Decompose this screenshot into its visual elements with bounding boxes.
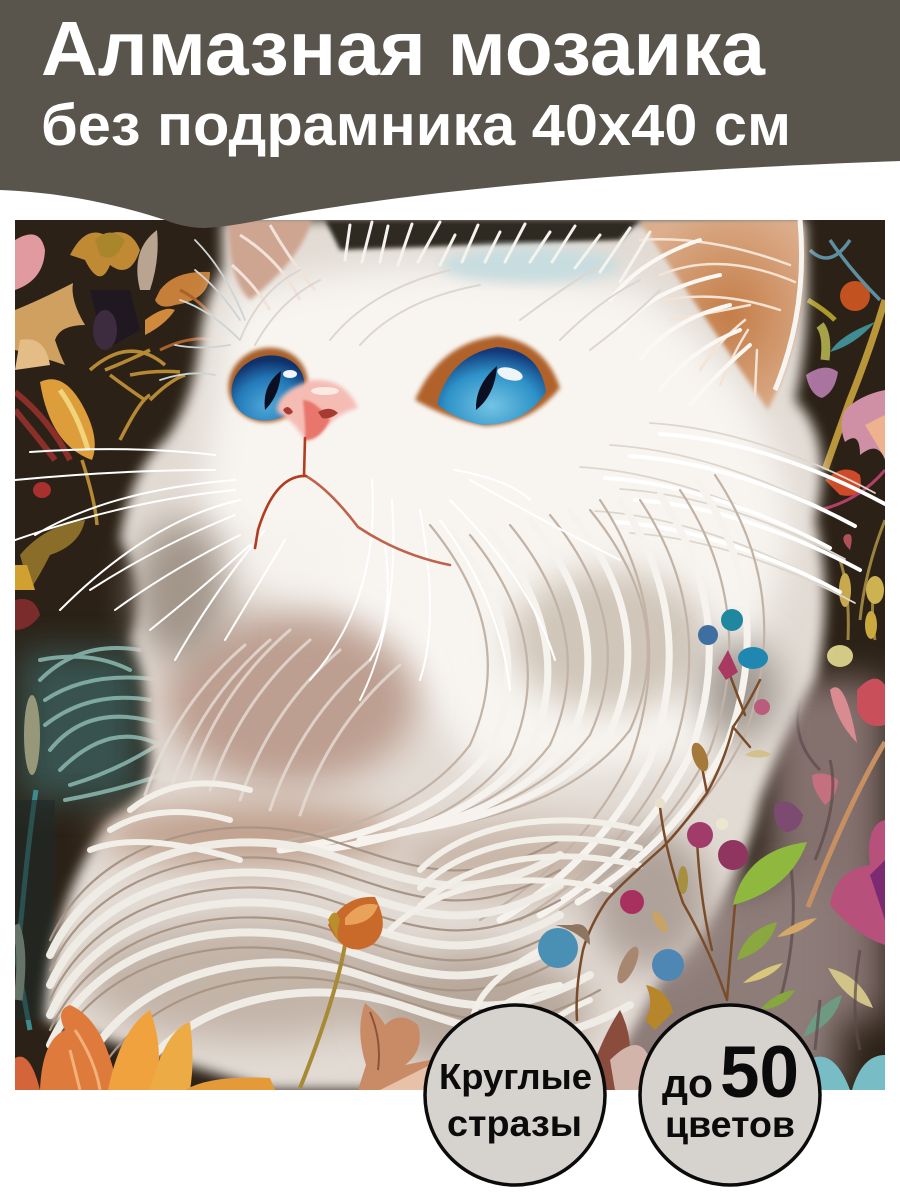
nose bbox=[277, 380, 358, 440]
cat ears bbox=[228, 220, 804, 410]
badge: up to 50 colours: 50 bbox=[720, 1032, 799, 1113]
subtitle: без подрамника 40х40 см bbox=[41, 93, 791, 158]
head fur fans bbox=[580, 423, 885, 603]
painting: white cat among flowers bbox=[15, 220, 885, 1105]
title: Алмазная мозаика bbox=[41, 6, 766, 92]
neck swirl fur bbox=[145, 475, 764, 920]
badge: round rhinestones: Круглые bbox=[439, 1056, 592, 1097]
right eye bbox=[415, 336, 560, 426]
lower body waves of fur bbox=[46, 780, 643, 1058]
whiskers bbox=[15, 449, 620, 700]
left flowers and foliage bbox=[15, 230, 215, 1030]
badge: round rhinestones: стразы bbox=[447, 1103, 582, 1144]
mouth bbox=[255, 438, 450, 565]
badge: up to 50 colours: цветов bbox=[665, 1104, 795, 1145]
top head fur bbox=[160, 220, 660, 380]
badge: up to 50 colours: до bbox=[662, 1062, 713, 1106]
painting background bbox=[15, 220, 885, 1090]
bottom orange flowers bbox=[15, 897, 430, 1090]
header banner bbox=[0, 0, 900, 228]
wildflower stems and blossoms bbox=[538, 609, 817, 1090]
cat body silhouette bbox=[45, 220, 825, 1090]
badge: up to 50 colours bbox=[640, 1005, 820, 1185]
badge: round rhinestones bbox=[425, 1005, 605, 1185]
left eye bbox=[224, 344, 311, 426]
chest and body shading bbox=[80, 520, 780, 1070]
right flowers and foliage bbox=[770, 240, 885, 1090]
